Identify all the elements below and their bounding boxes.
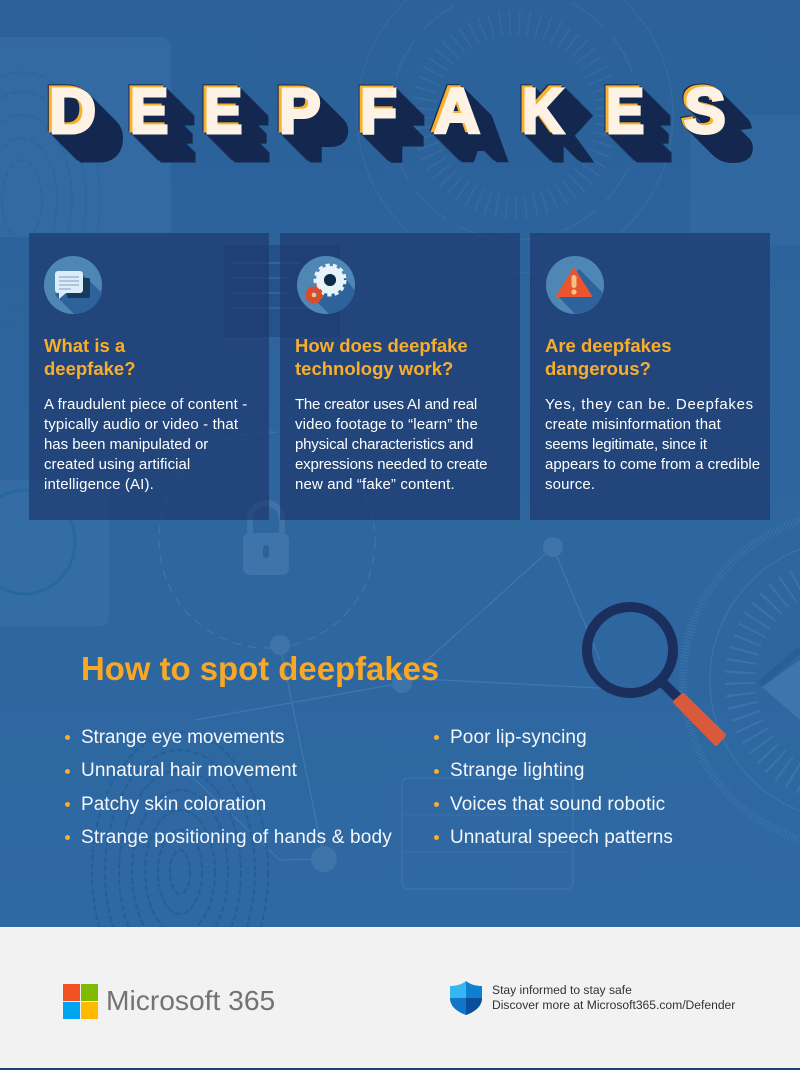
body text: create misinformation that <box>545 416 721 433</box>
body text: seems legitimate, since it <box>545 436 707 453</box>
body text <box>44 396 247 493</box>
background padlock <box>243 503 289 575</box>
heading: Are deepfakes <box>545 335 671 356</box>
body text: expressions needed to create <box>295 456 487 473</box>
body text: Yes, they can be. Deepfakes <box>545 396 754 413</box>
title <box>48 75 753 163</box>
heading <box>44 335 136 379</box>
list: right column: Poor lip-syncing <box>450 727 587 748</box>
body text: intelligence (AI). <box>44 476 154 493</box>
body text: video footage to “learn” the <box>295 416 478 433</box>
heading: how to spot deepfakes: How to spot deepfakes <box>81 650 439 687</box>
panel: are deepfakes dangerous <box>530 233 770 520</box>
body text: created using artificial <box>44 456 190 473</box>
tagline <box>492 983 736 1012</box>
logo: Microsoft squares <box>63 984 98 1019</box>
heading <box>545 335 671 379</box>
body text: A fraudulent piece of content - <box>44 396 247 413</box>
list: left column <box>65 727 392 848</box>
body text: has been manipulated or <box>44 436 208 453</box>
title: D <box>49 75 96 147</box>
heading: How does deepfake <box>295 335 468 356</box>
title: S <box>684 75 726 147</box>
title: A <box>434 75 480 147</box>
brand name: Microsoft 365 <box>106 984 275 1016</box>
heading <box>295 335 468 379</box>
footer <box>0 927 800 1070</box>
body text <box>545 396 760 493</box>
tagline: Stay informed to stay safe <box>492 983 632 997</box>
icon: speech bubbles <box>44 256 102 314</box>
bottom rule <box>0 1068 800 1070</box>
body text: new and “fake” content. <box>295 476 455 493</box>
title: E <box>606 75 644 147</box>
list: left column: Patchy skin coloration <box>81 794 266 815</box>
list: right column <box>434 727 673 848</box>
list: right column: Voices that sound robotic <box>450 794 665 815</box>
title: E <box>204 75 242 147</box>
heading: What is a <box>44 335 125 356</box>
body text <box>295 396 487 493</box>
list: left column: Strange eye movements <box>81 727 284 748</box>
list: right column: Strange lighting <box>450 760 585 781</box>
title: P <box>279 75 321 147</box>
icon: gears <box>297 256 355 314</box>
body text: appears to come from a credible <box>545 456 760 473</box>
icon: shield <box>450 981 482 1015</box>
panel: how does it work <box>280 233 520 520</box>
body text: source. <box>545 476 595 493</box>
title: K <box>522 75 564 147</box>
heading: dangerous? <box>545 358 651 379</box>
list: right column: Unnatural speech patterns <box>450 827 673 848</box>
title: E <box>130 75 168 147</box>
title: F <box>360 75 397 147</box>
heading: technology work? <box>295 358 453 379</box>
icon: magnifying glass <box>582 602 726 746</box>
body text: typically audio or video - that <box>44 416 238 433</box>
list: left column: Strange positioning of hands & body <box>81 827 392 848</box>
body text: The creator uses AI and real <box>295 396 477 413</box>
heading: deepfake? <box>44 358 136 379</box>
icon: warning triangle <box>546 256 604 314</box>
list: left column: Unnatural hair movement <box>81 760 297 781</box>
body text: physical characteristics and <box>295 436 473 453</box>
panel: what is a deepfake <box>29 233 269 520</box>
tagline: Discover more at Microsoft365.com/Defender <box>492 998 735 1012</box>
